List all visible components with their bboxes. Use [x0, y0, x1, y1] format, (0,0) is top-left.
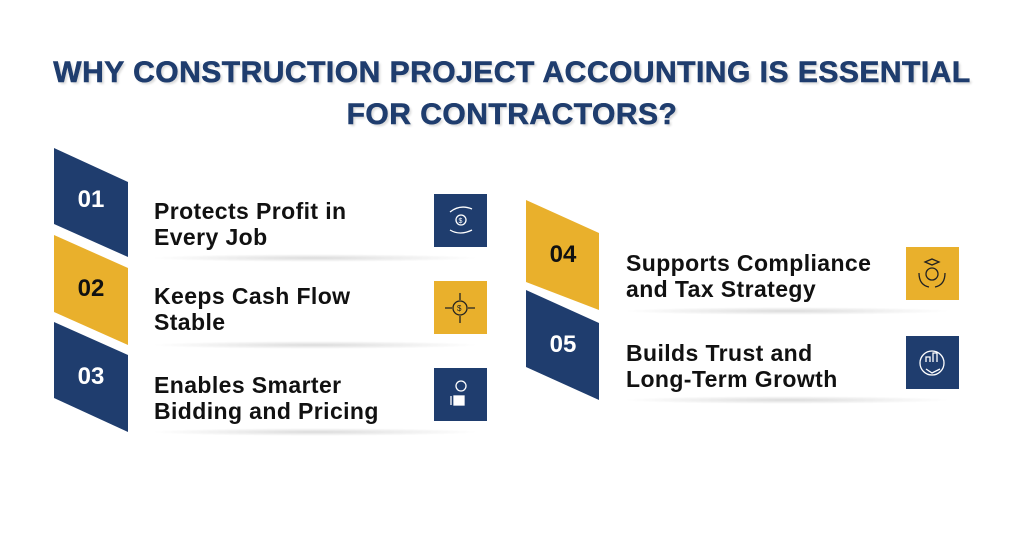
icon: cash flow	[434, 281, 487, 334]
icon: compliance	[906, 247, 959, 300]
icon: growth handshake	[906, 336, 959, 389]
title: FOR CONTRACTORS?	[347, 98, 677, 131]
item 01	[78, 186, 487, 250]
text 04	[626, 250, 871, 302]
icon: hands dollar: $	[458, 218, 462, 225]
text 02	[154, 283, 350, 335]
number 05: 05	[550, 331, 576, 358]
text 02: Stable	[154, 309, 225, 335]
number 01: 01	[78, 186, 104, 213]
text 05: Builds Trust and	[626, 340, 813, 366]
text 04: Supports Compliance	[626, 250, 871, 276]
text 03	[154, 372, 379, 424]
text 05: Long-Term Growth	[626, 366, 838, 392]
number 02: 02	[78, 275, 104, 302]
text 01	[154, 198, 347, 250]
number 04: 04	[550, 241, 576, 268]
title: WHY CONSTRUCTION PROJECT ACCOUNTING IS ESSENTIAL	[53, 56, 971, 89]
text 05	[626, 340, 838, 392]
title	[52, 56, 972, 131]
icon: hands dollar	[434, 194, 487, 247]
item 03	[78, 363, 487, 424]
number 03: 03	[78, 363, 104, 390]
item 04	[550, 241, 959, 302]
item 02	[78, 275, 487, 335]
text 03: Enables Smarter	[154, 372, 342, 398]
text 01: Every Job	[154, 224, 268, 250]
text 04: and Tax Strategy	[626, 276, 816, 302]
text 03: Bidding and Pricing	[154, 398, 379, 424]
icon: bidding	[434, 368, 487, 421]
text 02: Keeps Cash Flow	[154, 283, 350, 309]
text 01: Protects Profit in	[154, 198, 347, 224]
item 05	[550, 331, 959, 392]
icon: cash flow: $	[457, 304, 462, 313]
